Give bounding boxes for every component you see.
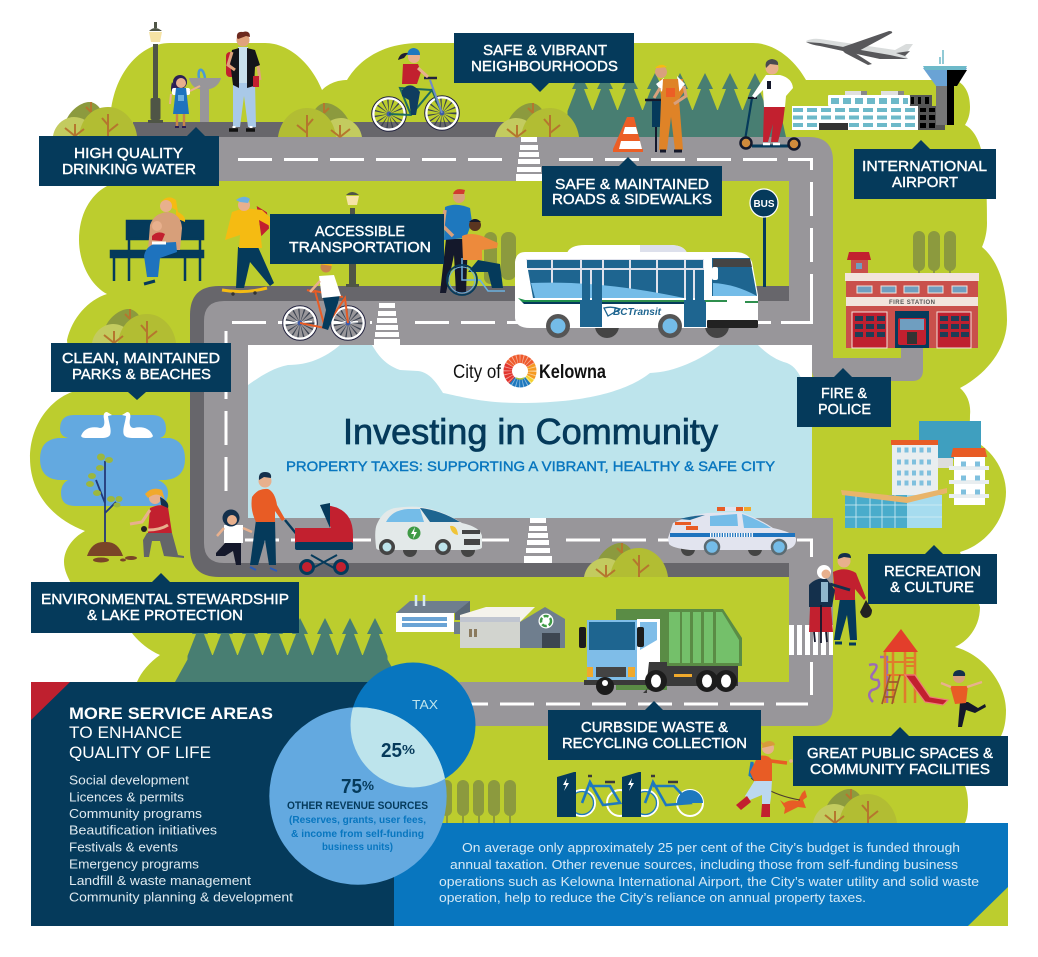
transit bus: BCTransit [613, 307, 662, 318]
label: curbside waste: CURBSIDE WASTE & [581, 719, 728, 736]
chart: tax and revenue venn diagram: % [402, 742, 415, 757]
panel: budget explanation: On average only approximately 25 per cent of the City’s budget is funded through [462, 840, 960, 855]
panel: more service areas: TO ENHANCE [69, 723, 182, 742]
girl at fountain [170, 75, 200, 127]
sapling [86, 454, 137, 562]
road dashes [226, 160, 812, 704]
chart: tax and revenue venn diagram: TAX [412, 697, 438, 712]
label: international airport [854, 140, 996, 199]
electric car [375, 507, 482, 557]
label: environmental stewardship: & LAKE PROTECTION [87, 607, 243, 624]
bus stop sign: BUS [754, 198, 774, 210]
panel: budget explanation: operations such as Kelowna International Airport, the City’s water utility and solid waste [439, 874, 979, 889]
label: safe and maintained roads [542, 157, 722, 216]
chart: tax and revenue venn diagram: OTHER REVENUE SOURCES [287, 800, 428, 812]
label: great public spaces: COMMUNITY FACILITIES [810, 761, 990, 778]
person on scooter [740, 59, 800, 150]
label: high quality drinking water [39, 127, 219, 186]
subtitle: PROPERTY TAXES: SUPPORTING A VIBRANT, HEALTHY & SAFE CITY [286, 458, 776, 474]
waste facility buildings [396, 595, 565, 648]
elderly woman and man walking [809, 553, 872, 644]
label: recreation and culture: RECREATION [884, 563, 981, 580]
label: environmental stewardship [31, 573, 299, 633]
label: fire and police: POLICE [818, 401, 871, 418]
white clouds in title panel [248, 345, 812, 403]
pine forest bottom [175, 618, 400, 682]
label: accessible transportation: TRANSPORTATION [289, 239, 431, 256]
panel: more service areas: Landfill & waste management [69, 873, 251, 888]
label: safe and vibrant neighbourhoods: SAFE & VIBRANT [483, 42, 607, 59]
lamp post 1 [148, 22, 163, 123]
panel: more service areas: Licences & permits [69, 789, 185, 804]
label: fire and police: FIRE & [821, 385, 867, 402]
panel: more service areas: MORE SERVICE AREAS [69, 704, 273, 723]
logo: City of Kelowna: City of [453, 362, 502, 383]
logo: City of Kelowna [453, 354, 606, 388]
woman with baby on bench [111, 197, 203, 284]
chart: tax and revenue venn diagram: (Reserves, grants, user fees, [289, 814, 426, 826]
panel: budget explanation: operation, help to reduce the City’s reliance on annual property taxes. [439, 890, 866, 905]
label: great public spaces [793, 727, 1008, 786]
fire station [845, 231, 979, 348]
swan lake [40, 412, 185, 506]
label: curbside waste: RECYCLING COLLECTION [562, 735, 747, 752]
woman on bicycle [372, 48, 459, 131]
label: environmental stewardship: ENVIRONMENTAL STEWARDSHIP [41, 591, 289, 608]
label: safe and vibrant neighbourhoods: NEIGHBOURHOODS [471, 58, 618, 75]
label: international airport: AIRPORT [892, 174, 958, 191]
middle road ring [204, 301, 833, 563]
bus stop sign [750, 189, 778, 287]
label: recreation and culture [868, 545, 997, 604]
lamp post 2 [346, 192, 359, 287]
label: accessible transportation [270, 214, 444, 264]
child walking [216, 510, 252, 565]
panel: budget explanation [394, 823, 1008, 926]
top road and right road [200, 137, 923, 381]
columnar trees near bus [484, 232, 516, 284]
crosswalks [374, 137, 833, 655]
panel: more service areas: Social development [69, 772, 189, 787]
panel: more service areas: Festivals & events [69, 839, 179, 854]
label: safe and maintained roads: SAFE & MAINTAINED [555, 176, 709, 193]
man pushing stroller [250, 472, 285, 571]
person in wheelchair [447, 219, 505, 295]
logo: City of Kelowna: Kelowna [539, 362, 606, 383]
man with backpack [226, 32, 260, 130]
man pushing wheelchair [440, 189, 472, 293]
playground [869, 629, 948, 705]
transit bus [515, 245, 758, 338]
label: clean parks and beaches [51, 343, 231, 400]
skateboarder [222, 197, 283, 296]
label: safe and maintained roads: ROADS & SIDEWALKS [552, 191, 712, 208]
airport terminal and tower [792, 50, 967, 130]
label: international airport: INTERNATIONAL [862, 158, 987, 175]
chart: tax and revenue venn diagram: 25 [381, 740, 402, 762]
panel: title background [248, 345, 812, 518]
lower right and bottom road [440, 518, 833, 726]
label: safe and vibrant neighbourhoods [454, 33, 634, 92]
chart: tax and revenue venn diagram [269, 662, 476, 885]
child on bicycle [283, 259, 365, 340]
panel: more service areas: QUALITY OF LIFE [69, 743, 211, 762]
label: curbside waste [548, 701, 761, 760]
label: great public spaces: GREAT PUBLIC SPACES & [807, 745, 993, 762]
bike share station [557, 772, 703, 817]
airplane [806, 31, 913, 65]
label: accessible transportation: ACCESSIBLE [315, 223, 405, 240]
chart: tax and revenue venn diagram: & income from self-funding [291, 828, 424, 840]
garbage truck [579, 609, 742, 695]
title: Investing in Community [343, 411, 718, 452]
police car [668, 507, 796, 556]
panel: more service areas [31, 682, 394, 926]
label: fire and police [797, 368, 891, 427]
panel: budget explanation: annual taxation. Other revenue sources, including those from self-funding business [450, 857, 959, 872]
bus stop pad and curb ring [190, 286, 789, 577]
label: recreation and culture: & CULTURE [890, 579, 974, 596]
girl walking dog [736, 738, 807, 817]
label: high quality drinking water: DRINKING WATER [62, 161, 196, 178]
label: clean parks and beaches: CLEAN, MAINTAINED [62, 350, 220, 367]
road worker with jackhammer [645, 65, 686, 152]
woman planting [130, 489, 184, 558]
panel: more service areas: Community planning & development [69, 890, 293, 905]
baby stroller [285, 503, 353, 574]
fire station: FIRE STATION [889, 300, 935, 306]
top sidewalk [133, 122, 513, 137]
panel: more service areas: Community programs [69, 806, 203, 821]
columnar trees row [441, 780, 516, 823]
drinking fountain [189, 70, 221, 122]
chart: tax and revenue venn diagram: % [362, 778, 374, 793]
traffic cone [613, 117, 643, 152]
chart: tax and revenue venn diagram: 75 [341, 776, 362, 798]
panel: more service areas: Beautification initiatives [69, 823, 218, 838]
recreation buildings [841, 421, 989, 528]
label: high quality drinking water: HIGH QUALITY [74, 145, 183, 162]
pine forest top [568, 73, 786, 137]
bushes [53, 102, 897, 823]
label: clean parks and beaches: PARKS & BEACHES [72, 366, 211, 383]
running boy [941, 670, 986, 727]
panel: more service areas: Emergency programs [69, 856, 200, 871]
chart: tax and revenue venn diagram: business units) [322, 841, 393, 853]
